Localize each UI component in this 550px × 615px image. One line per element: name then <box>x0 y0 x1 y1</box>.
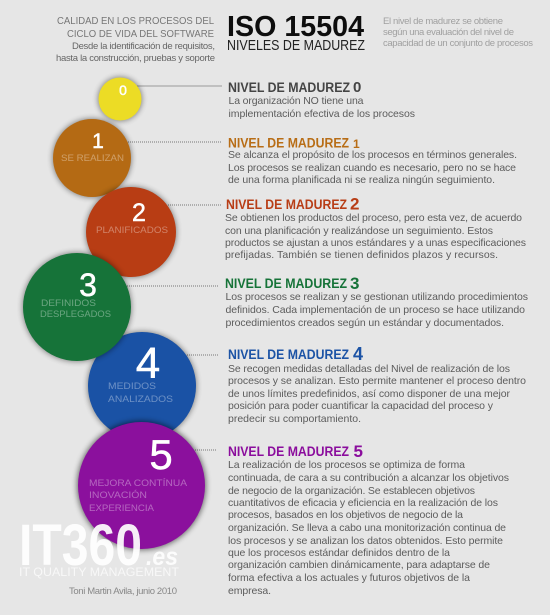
header: left intro text: CALIDAD EN LOS PROCESOS DEL <box>57 15 214 27</box>
text block: level 5: forma efectiva a los actuales y futuros objetivos de la <box>228 572 470 584</box>
text block: level 5 <box>228 442 509 597</box>
circle: level 0 <box>98 77 142 121</box>
header: left intro text <box>56 15 215 64</box>
text block: level 2 <box>225 194 526 261</box>
circle: level 3: DEFINIDOS <box>41 298 96 309</box>
circle: level 1: SE REALIZAN <box>61 153 124 164</box>
circle: level 3: 3 <box>79 267 97 303</box>
text block: level 4: procesos y se analizan. Esto permite mantener el proceso dentro <box>228 375 526 387</box>
circle: level 5: EXPERIENCIA <box>89 503 155 514</box>
circle: level 4: ANALIZADOS <box>108 394 173 405</box>
circle: level 5 <box>77 421 206 550</box>
header: left intro text: CICLO DE VIDA DEL SOFTWARE <box>67 28 214 40</box>
text block: level 4: NIVEL DE MADUREZ <box>228 347 349 362</box>
logo: IT360.es: IT QUALITY MANAGEMENT <box>19 567 179 579</box>
text block: level 5: organización cambien dinámicamente, para adaptarse de <box>228 559 490 571</box>
circle: level 2: 2 <box>132 199 146 227</box>
header: right note: capacidad de un conjunto de procesos <box>383 38 533 49</box>
text block: level 5: NIVEL DE MADUREZ <box>228 444 349 459</box>
logo: IT360.es: IT360 <box>19 513 142 578</box>
text block: level 4: posición para poder cuantificar la capacidad del proceso y <box>228 400 494 412</box>
text block: level 3 <box>225 274 528 329</box>
circle: level 4: 4 <box>136 339 160 388</box>
text block: level 4: Se recogen medidas detalladas del Nivel de realización de los <box>228 363 510 375</box>
text block: level 5: La realización de los procesos se optimiza de forma <box>228 459 465 471</box>
text block: level 0: implementación efectiva de los procesos <box>228 108 415 120</box>
text block: level 5: los procesos y se analizan los datos obtenidos. Esto permite <box>228 535 503 547</box>
text block: level 5: cuantitativos de eficacia y eficiencia en la realización de los <box>228 497 498 509</box>
circle: level 3: DESPLEGADOS <box>40 309 111 320</box>
text block: level 1 <box>228 136 517 186</box>
circle: level 4: MEDIDOS <box>108 381 156 392</box>
text block: level 0 <box>228 79 415 120</box>
connector: level 5 <box>193 449 217 451</box>
text block: level 3: definidos. Cada implementación de un proceso se hace utilizando <box>226 304 525 316</box>
header: right note: según una evaluación del nivel de <box>383 27 514 38</box>
circle: level 5: MEJORA CONTÍNUA <box>89 478 188 489</box>
text block: level 5: empresa. <box>228 585 271 597</box>
text block: level 4: 4 <box>353 344 363 364</box>
circle: level 1 <box>52 118 132 198</box>
header: left intro text: hasta la construcción, pruebas y soporte <box>56 53 215 64</box>
text block: level 3: Los procesos se realizan y se gestionan utilizando procedimientos <box>226 291 528 303</box>
connector: level 4 <box>187 354 219 356</box>
text block: level 2: productos se ajustan a unos estándares y a unas especificaciones <box>225 237 526 249</box>
text block: level 2: con una planificación y realizándose un seguimiento. Estos <box>225 225 493 237</box>
circle: level 2: PLANIFICADOS <box>96 225 168 236</box>
text block: level 0: 0 <box>353 79 361 96</box>
text block: level 5: de negocio de la organización. Se establecen objetivos <box>228 485 475 497</box>
circle: level 4 <box>88 332 196 440</box>
text block: level 4: predecir su comportamiento. <box>228 413 361 425</box>
text block: level 3: NIVEL DE MADUREZ <box>225 276 347 291</box>
header: right note <box>383 16 533 49</box>
header: left intro text: Desde la identificación de requisitos, <box>72 41 215 52</box>
text block: level 5: organización. Se lleva a cabo una monitorización continua de <box>228 522 506 534</box>
text block: level 1: 1 <box>353 137 360 151</box>
logo: IT360.es: .es <box>146 543 178 571</box>
text block: level 5: procesos, basados en los objetivos de negocio de la <box>228 509 463 521</box>
circle: level 3 <box>22 252 132 362</box>
text block: level 5: continuada, de cara a su contribución a alcanzar los objetivos <box>228 472 509 484</box>
header: main title: ISO 15504 <box>227 11 364 43</box>
text block: level 5: que los procesos estándar definidos dentro de la <box>228 547 450 559</box>
circle: level 2 <box>86 186 176 278</box>
text block: level 4: de unos límites predefinidos, así como disponer de una mejor <box>228 388 510 400</box>
text block: level 1: NIVEL DE MADUREZ <box>228 136 349 150</box>
text block: level 4 <box>228 344 526 425</box>
connector: level 2 <box>168 204 221 206</box>
text block: level 3: 3 <box>350 274 359 293</box>
circle: level 0: 0 <box>119 82 127 98</box>
connector: level 0 <box>137 85 222 87</box>
header: right note: El nivel de madurez se obtiene <box>383 16 503 27</box>
text block: level 2: NIVEL DE MADUREZ <box>226 197 347 212</box>
header: main title: NIVELES DE MADUREZ <box>227 38 365 54</box>
circle: level 5: INOVACIÓN <box>89 490 147 501</box>
text block: level 1: Los procesos se realizan cuando es necesario, pero no se hace <box>228 162 516 174</box>
text block: level 0: NIVEL DE MADUREZ <box>228 80 350 95</box>
connector: level 3 <box>127 285 218 287</box>
text block: level 2: Se obtienen los productos del proceso, pero esta vez, de acuerdo <box>225 212 522 224</box>
circle: level 5: 5 <box>149 431 173 478</box>
text block: level 3: procedimientos creados según un estándar y documentados. <box>226 317 504 329</box>
text block: level 1: de una forma planificada ni se realiza ningún seguimiento. <box>228 174 495 186</box>
author credit: Toni Martin Avila, junio 2010 <box>69 586 177 597</box>
text block: level 2: prefijadas. También se tienen definidos plazos y recursos. <box>225 249 498 261</box>
text block: level 0: La organización NO tiene una <box>228 95 364 107</box>
text block: level 2: 2 <box>350 194 359 214</box>
text block: level 5: 5 <box>354 442 363 461</box>
connector: level 1 <box>128 141 222 143</box>
text block: level 1: Se alcanza el propósito de los procesos en términos generales. <box>228 149 517 161</box>
circle: level 1: 1 <box>92 130 104 153</box>
